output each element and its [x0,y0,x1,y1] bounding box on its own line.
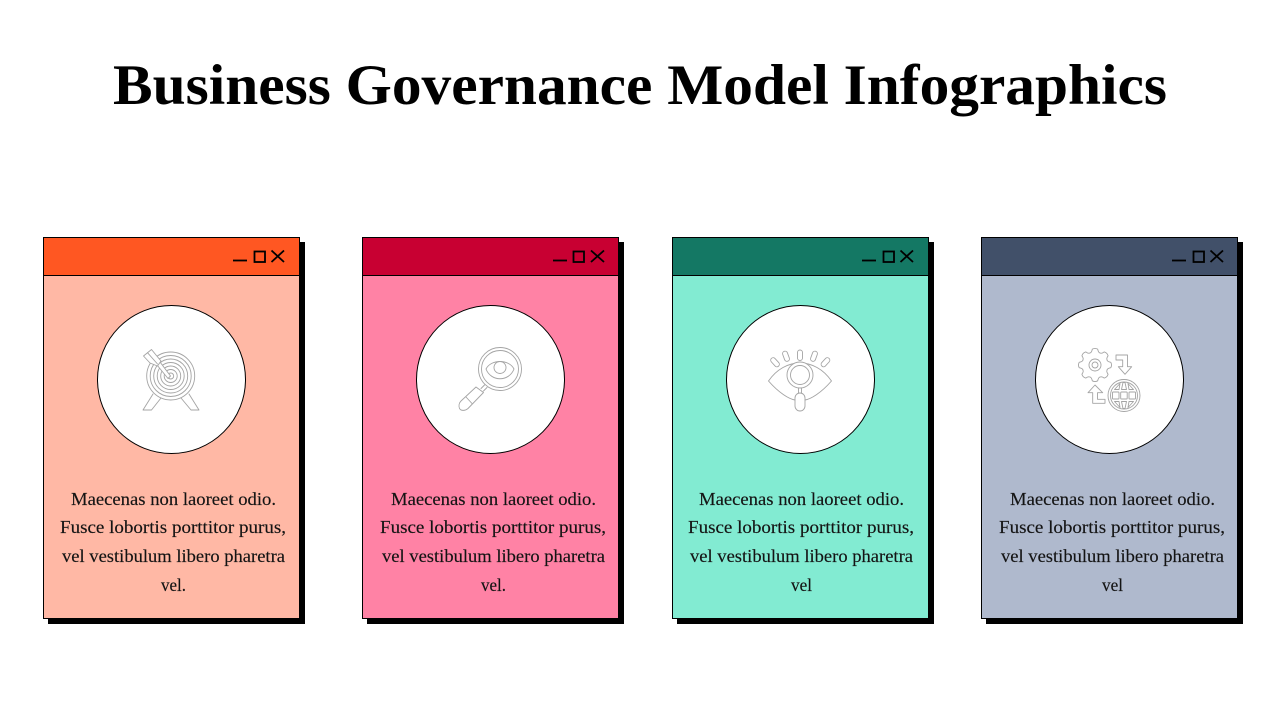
card 2 text [380,489,606,595]
card 1 body [44,238,300,618]
panel: card 1 target [44,238,305,624]
card 1 window controls [233,250,284,262]
card 3 text: vel [791,575,812,595]
card 3 text: vel vestibulum libero pharetra [690,546,913,566]
icon: eye with magnifier [768,350,832,411]
card 4 text: Maecenas non laoreet odio. [1010,489,1215,509]
card 1 text: Fusce lobortis porttitor purus, [60,517,286,537]
card 1 icon circle [98,306,246,454]
card 4 title bar [982,238,1238,276]
card 3 title bar [672,238,928,276]
icon: target with arrow [143,350,199,410]
card 4 text: Fusce lobortis porttitor purus, [999,517,1225,537]
card 4 text [999,489,1225,595]
card 4 text: vel vestibulum libero pharetra [1001,546,1224,566]
card 3 text: Maecenas non laoreet odio. [699,489,904,509]
card 2 icon circle [416,306,564,454]
panel: card 4 gear and globe [982,238,1243,624]
card 2 text: vel. [481,575,506,595]
card 3 text [688,489,914,595]
panel: card 2 magnifier [362,238,624,624]
card 3 text: Fusce lobortis porttitor purus, [688,517,914,537]
card 2 title bar [362,238,618,276]
card 3 icon circle [726,306,874,454]
card 4 body [982,238,1238,618]
icon: magnifier with eye [459,348,522,410]
card 1 shadow [48,242,305,624]
card 2 body [362,238,618,618]
card 4 icon circle [1036,306,1184,454]
card 2 text: vel vestibulum libero pharetra [382,546,605,566]
card 2 text: Fusce lobortis porttitor purus, [380,517,606,537]
card 2 text: Maecenas non laoreet odio. [391,489,596,509]
icon: gear, arrows and globe [1078,348,1140,412]
card 4 shadow [986,242,1243,624]
card 1 text: vel vestibulum libero pharetra [62,546,285,566]
card 2 window controls [553,250,604,262]
card 4 text: vel [1102,575,1123,595]
card 2 shadow [367,242,624,624]
card 3 window controls [862,250,913,262]
card 1 text: Maecenas non laoreet odio. [71,489,276,509]
card 1 text [60,489,286,595]
title: Business Governance Model Infographics [113,54,1167,117]
card 1 text: vel. [161,575,186,595]
panel: card 3 eye [672,238,934,624]
card 3 body [672,238,928,618]
card 3 shadow [677,242,934,624]
card 4 window controls [1172,250,1223,262]
card 1 title bar [44,238,300,276]
